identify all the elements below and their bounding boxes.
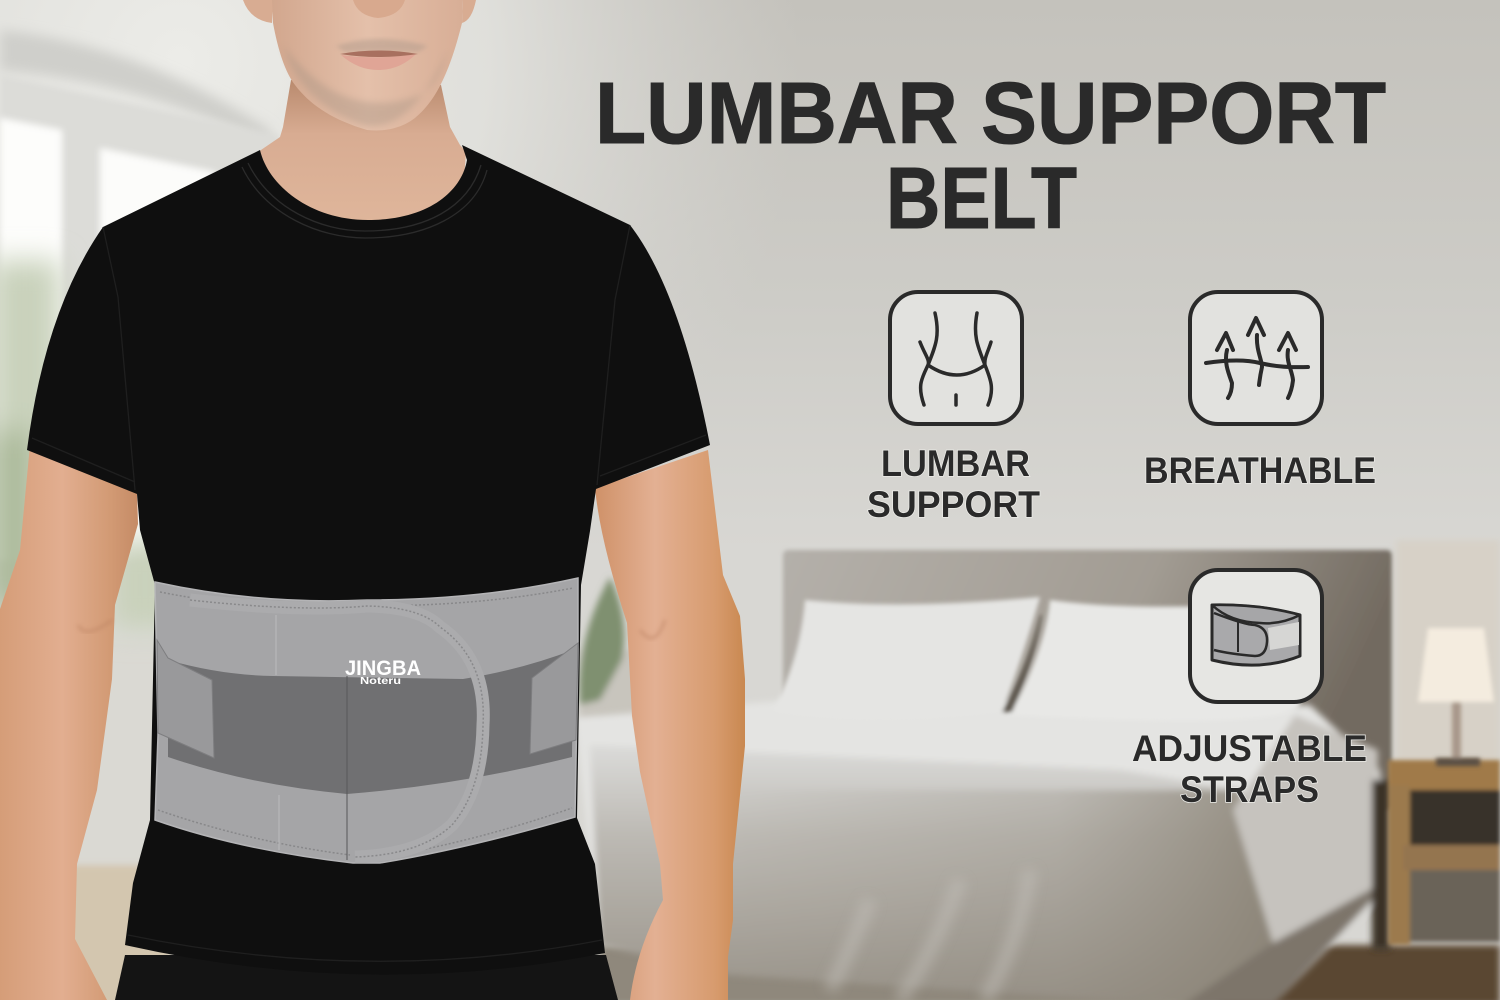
nightstand [1388,760,1500,945]
right elbow crease [640,620,665,638]
label: adjustable straps [1132,728,1367,810]
ears [243,0,476,23]
foliage outside window [0,260,180,630]
man wearing belt [0,0,745,1000]
right strap [530,643,578,754]
wall beside bed, right [1396,540,1500,765]
dark centre band [168,650,573,794]
lamp [1418,628,1494,766]
moustache shadow [336,39,428,52]
t-shirt [27,145,710,975]
headboard [783,550,1392,810]
mouth [340,50,418,70]
icon: breathable fabric arrows [1190,292,1322,424]
icon: torso [890,292,1022,424]
flap edge [190,600,483,857]
title: LUMBAR SUPPORT [595,65,1386,162]
label: breathable: BREATHABLE [1144,450,1376,491]
label: lumbar support: LUMBAR [881,443,1030,484]
face [272,0,463,130]
belt logo: JINGBA [345,657,421,680]
floor [600,945,1500,1000]
label: lumbar support [867,443,1040,525]
ceiling soffit band [0,30,270,145]
feature: lumbar support [867,292,1040,525]
duvet pleats [830,870,1030,1000]
right arm [595,450,745,1000]
pants [115,955,618,1000]
neck [258,80,466,235]
label: adjustable straps: STRAPS [1180,769,1319,810]
left arm [0,445,138,1000]
feature: breathable [1144,292,1376,491]
nose [353,0,405,18]
belt logo: Noteru [360,676,401,687]
lumbar belt [155,578,578,863]
left strap [157,640,214,758]
collar ribs [242,163,487,238]
title: BELT [886,150,1077,247]
title [595,65,1386,247]
feature: adjustable straps [1132,570,1367,810]
label: adjustable straps: ADJUSTABLE [1132,728,1367,769]
stubble [283,45,448,126]
icon: belt [1190,570,1322,702]
window [0,75,280,1000]
belt body [155,578,578,863]
bed [575,700,1390,1000]
left elbow crease [78,620,112,631]
stitching [160,588,573,607]
bright left wall glow [0,0,820,700]
label: lumbar support: SUPPORT [867,484,1040,525]
pillows [772,597,1300,721]
plant [579,577,640,720]
shirt seams and hems [32,225,706,961]
